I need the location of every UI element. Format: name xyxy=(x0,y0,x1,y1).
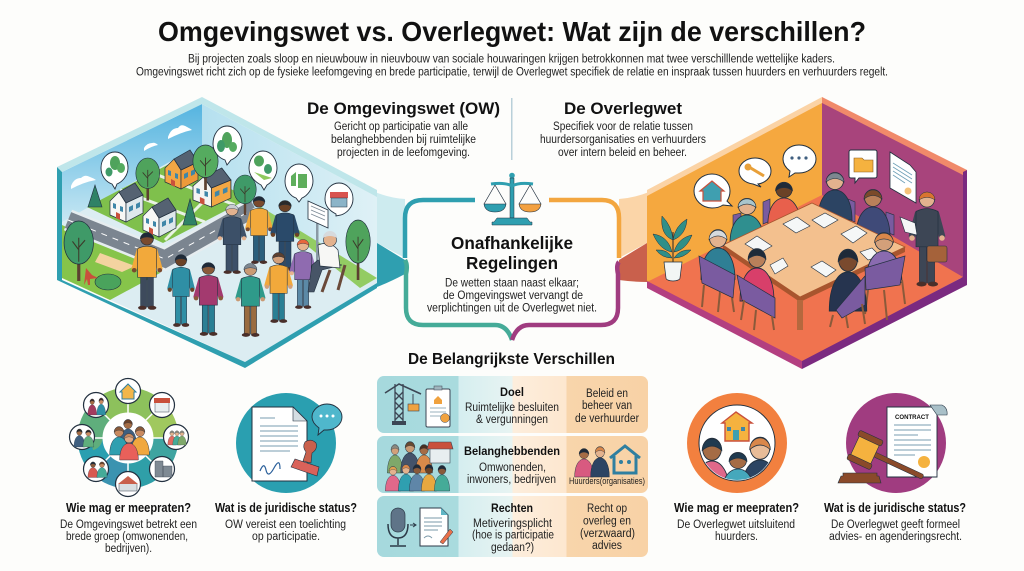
text: juridische status (Overlegwet): advies- en agenderingsrecht. xyxy=(829,531,962,543)
connector ribbons xyxy=(375,192,649,287)
body text: verplichtingen uit de Overlegwet niet. xyxy=(427,302,597,314)
text: Rechten right xyxy=(580,503,635,552)
ground xyxy=(62,160,377,362)
text: Omgevingswet description: projecten in de leefomgeving. xyxy=(337,147,470,159)
heading: De Belangrijkste Verschillen: De Belangrijkste Verschillen xyxy=(408,351,615,368)
orange wall xyxy=(647,100,822,285)
body text: de Omgevingswet vervangt de xyxy=(443,290,583,302)
text: Rechten: Rechten xyxy=(491,501,533,515)
text: Overlegwet description: huurdersorganisaties en verhuurders xyxy=(540,134,706,146)
text: Rechten right: Recht op xyxy=(587,503,627,515)
text: Belanghebbenden: inwoners, bedrijven xyxy=(467,474,556,486)
plant xyxy=(653,216,692,281)
outer nodes xyxy=(70,378,188,496)
lower-left park xyxy=(62,225,160,300)
icon: crane xyxy=(385,384,421,425)
icon: microphone xyxy=(388,508,416,546)
text: Huurders: Huurders(organisaties) xyxy=(569,476,645,486)
card outline xyxy=(405,200,619,340)
intro text: Bij projecten zoals sloop en nieuwbouw in nieuvbouw van sociale houwaringen krijgen betrokkonnen mat twee verschilllende wettelijke kaders. xyxy=(188,54,835,66)
body text: De wetten staan naast elkaar; xyxy=(445,278,579,290)
speech bubble: key xyxy=(739,158,771,187)
text: Belanghebbenden: Belanghebbenden xyxy=(464,444,560,458)
people back row xyxy=(218,196,316,309)
text: juridische status (OW) xyxy=(215,500,357,543)
icon: crowd and shop xyxy=(385,442,453,491)
text: juridische status (Overlegwet): Wat is de juridische status? xyxy=(824,500,966,515)
text: Wie mag er meepraten (Overlegwet) xyxy=(674,500,799,543)
icon: legal document with stamp xyxy=(236,393,342,493)
text: Omgevingswet description: Gericht op participatie van alle xyxy=(334,121,468,133)
text: Rechten: (hoe is participatie xyxy=(472,530,554,542)
text: juridische status (OW): op participatie. xyxy=(252,531,320,543)
wall rims xyxy=(647,97,822,196)
housing block xyxy=(87,162,250,243)
text: Omgevingswet description: belanghebbenden bij ruimtelijke xyxy=(331,134,476,146)
speech bubble: dots xyxy=(783,145,816,177)
row: Doel xyxy=(377,376,648,433)
people front row xyxy=(132,233,292,337)
text: Rechten xyxy=(472,501,554,554)
floor xyxy=(647,195,963,362)
text: juridische status (Overlegwet) xyxy=(824,500,966,543)
front chairs and people xyxy=(699,230,905,330)
floor edges xyxy=(647,281,802,369)
text: Doel right: de verhuurder xyxy=(575,413,639,425)
text: Doel: & vergunningen xyxy=(476,414,548,426)
speech bubble: house xyxy=(694,174,732,208)
icon: tenants with house xyxy=(687,393,787,500)
notice board xyxy=(308,201,328,268)
text: Wie mag er meepraten (Overlegwet): De Overlegwet uitsluitend xyxy=(677,519,795,531)
central group xyxy=(110,419,149,460)
text: Rechten right: (verzwaard) xyxy=(580,528,635,540)
text: Overlegwet description: over intern beleid en beheer. xyxy=(558,147,687,159)
purple wall xyxy=(822,100,965,280)
document on wall xyxy=(890,152,916,203)
title: Omgevingswet vs. Overlegwet: Wat zijn de verschillen? xyxy=(158,16,866,47)
comparison table xyxy=(377,376,648,557)
node glyphs xyxy=(74,384,186,491)
top rim xyxy=(57,97,377,197)
intro text xyxy=(136,54,888,78)
heading: De Overlegwet: De Overlegwet xyxy=(564,99,682,118)
icon: gavel and contract xyxy=(838,393,947,493)
text: Wie mag er meepraten (OW): De Omgevingswet betrekt een xyxy=(60,519,197,531)
speech bubbles with places xyxy=(101,126,353,216)
icon: gavel and contract: CONTRACT xyxy=(895,414,929,421)
heading: De Omgevingswet: De Omgevingswet (OW) xyxy=(307,99,500,118)
text: juridische status (Overlegwet): De Overlegwet geeft formeel xyxy=(831,519,960,531)
panel: Overlegwet meeting room scene xyxy=(647,97,967,369)
text: Overlegwet description: Specifiek voor de relatie tussen xyxy=(553,121,693,133)
left wall xyxy=(62,104,202,225)
row: Belanghebbenden xyxy=(377,436,648,493)
text: Omgevingswet description xyxy=(331,121,476,159)
text: Rechten right: overleg en xyxy=(583,516,631,528)
text: Wie mag er meepraten (Overlegwet): huurders. xyxy=(715,531,758,543)
icon: scales of justice xyxy=(484,173,541,225)
text: juridische status (OW): Wat is de juridische status? xyxy=(215,500,357,515)
text: Doel: Ruimtelijke besluiten xyxy=(465,402,559,414)
text: Wie mag er meepraten (OW): brede groep (omwonenden, xyxy=(66,531,188,543)
text: Wie mag er meepraten (OW) xyxy=(60,500,197,555)
text: Rechten: gedaan?) xyxy=(491,542,534,554)
icon: stakeholder ring xyxy=(70,378,188,496)
seated person xyxy=(308,231,345,292)
heading: Onafhankelijke xyxy=(451,233,573,253)
text: Overlegwet description xyxy=(540,121,706,159)
text: Belanghebbenden xyxy=(464,444,560,486)
bottom and left edges xyxy=(57,167,377,368)
text: Wie mag er meepraten (OW): bedrijven). xyxy=(105,543,152,555)
icon: tenants and house xyxy=(575,446,640,477)
text: Doel xyxy=(465,385,559,426)
intro text: Omgevingswet richt zich op de fysieke leefomgeving en brede participatie, terwijl de Overlegwet specifiek de relatie en inspraak tussen huurders en verhuurders regelt. xyxy=(136,66,888,78)
papers on table xyxy=(745,213,880,277)
icon: permit clipboard xyxy=(426,386,450,427)
text: Doel right: Beleid en xyxy=(586,388,628,400)
standing man with briefcase xyxy=(900,192,947,287)
right grass xyxy=(258,205,377,288)
row: Rechten xyxy=(377,496,648,557)
text: Wie mag er meepraten (Overlegwet): Wie mag er meepraten? xyxy=(674,500,799,515)
icon: document with pencil xyxy=(420,508,453,546)
text: Wie mag er meepraten (OW): Wie mag er meepraten? xyxy=(66,500,191,515)
houses xyxy=(110,150,231,237)
text: Rechten right: advies xyxy=(592,540,622,552)
callout: Onafhankelijke Regelingen xyxy=(405,173,619,340)
panel: Omgevingswet neighbourhood scene xyxy=(57,97,377,368)
text: juridische status (OW): OW vereist een toelichting xyxy=(225,519,346,531)
clouds xyxy=(71,125,192,189)
body text xyxy=(427,278,597,314)
text: Doel: Doel xyxy=(500,385,524,399)
heading xyxy=(451,233,573,273)
text: Belanghebbenden: Omwonenden, xyxy=(479,462,546,474)
text: Rechten: Metiveringsplicht xyxy=(473,518,553,530)
road xyxy=(68,208,255,259)
heading: Regelingen xyxy=(466,253,558,273)
trees xyxy=(64,145,370,290)
text: Doel right xyxy=(575,388,639,425)
meeting table xyxy=(723,203,905,330)
text: Doel right: beheer van xyxy=(582,400,632,412)
back chairs and people xyxy=(730,172,894,244)
speech bubble: folder xyxy=(849,150,877,183)
right wall xyxy=(202,104,377,280)
